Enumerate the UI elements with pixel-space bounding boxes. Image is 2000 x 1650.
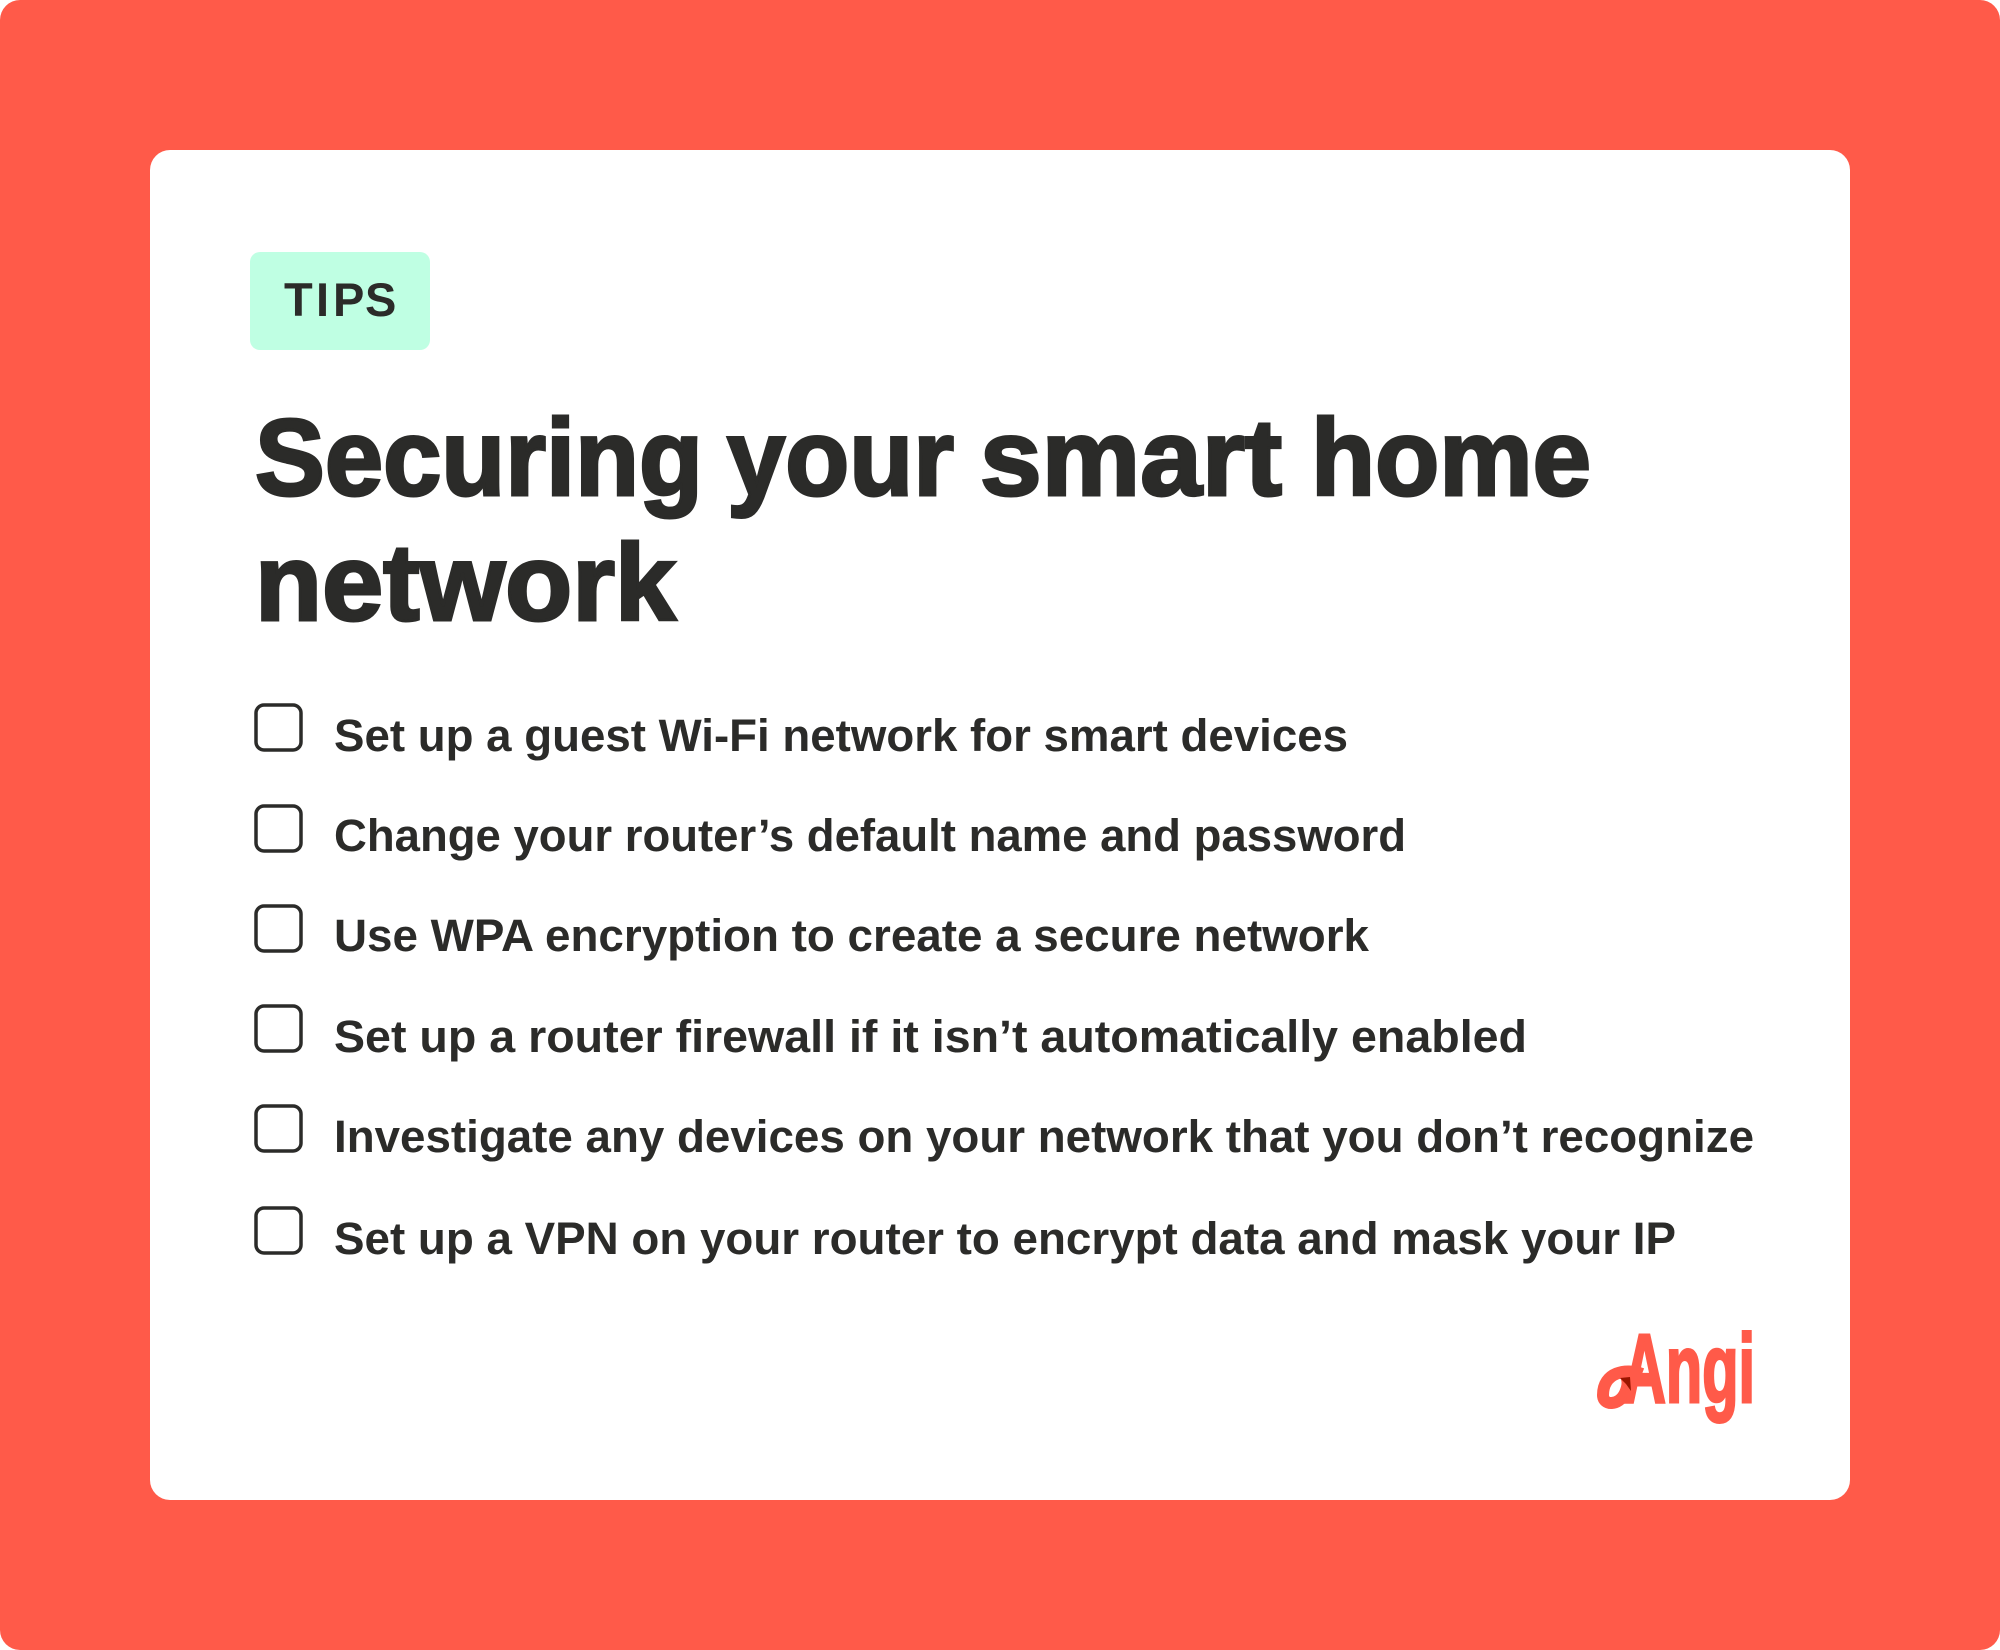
logo: Angi: Angi [1623,1314,1755,1423]
heading: your [727,397,954,519]
heading: home [1311,397,1591,519]
panel: white card [150,150,1850,1500]
checklist [256,705,1754,1264]
item 1: Set up a guest Wi-Fi network for smart devices [334,710,1348,761]
heading: smart [980,397,1282,519]
heading [255,397,1591,644]
tag: tips: TIPS [284,273,396,326]
item 3: Use WPA encryption to create a secure network [334,910,1370,961]
item 2: Change your router’s default name and password [334,810,1406,861]
heading: Securing [255,397,703,519]
item 6: Set up a VPN on your router to encrypt data and mask your IP [334,1213,1676,1264]
heading: network [255,522,676,644]
item 5: Investigate any devices on your network that you don’t recognize [334,1111,1754,1162]
tag: tips [250,252,430,350]
logo: Angi [1603,1314,1755,1423]
item 4: Set up a router firewall if it isn’t automatically enabled [334,1011,1527,1062]
